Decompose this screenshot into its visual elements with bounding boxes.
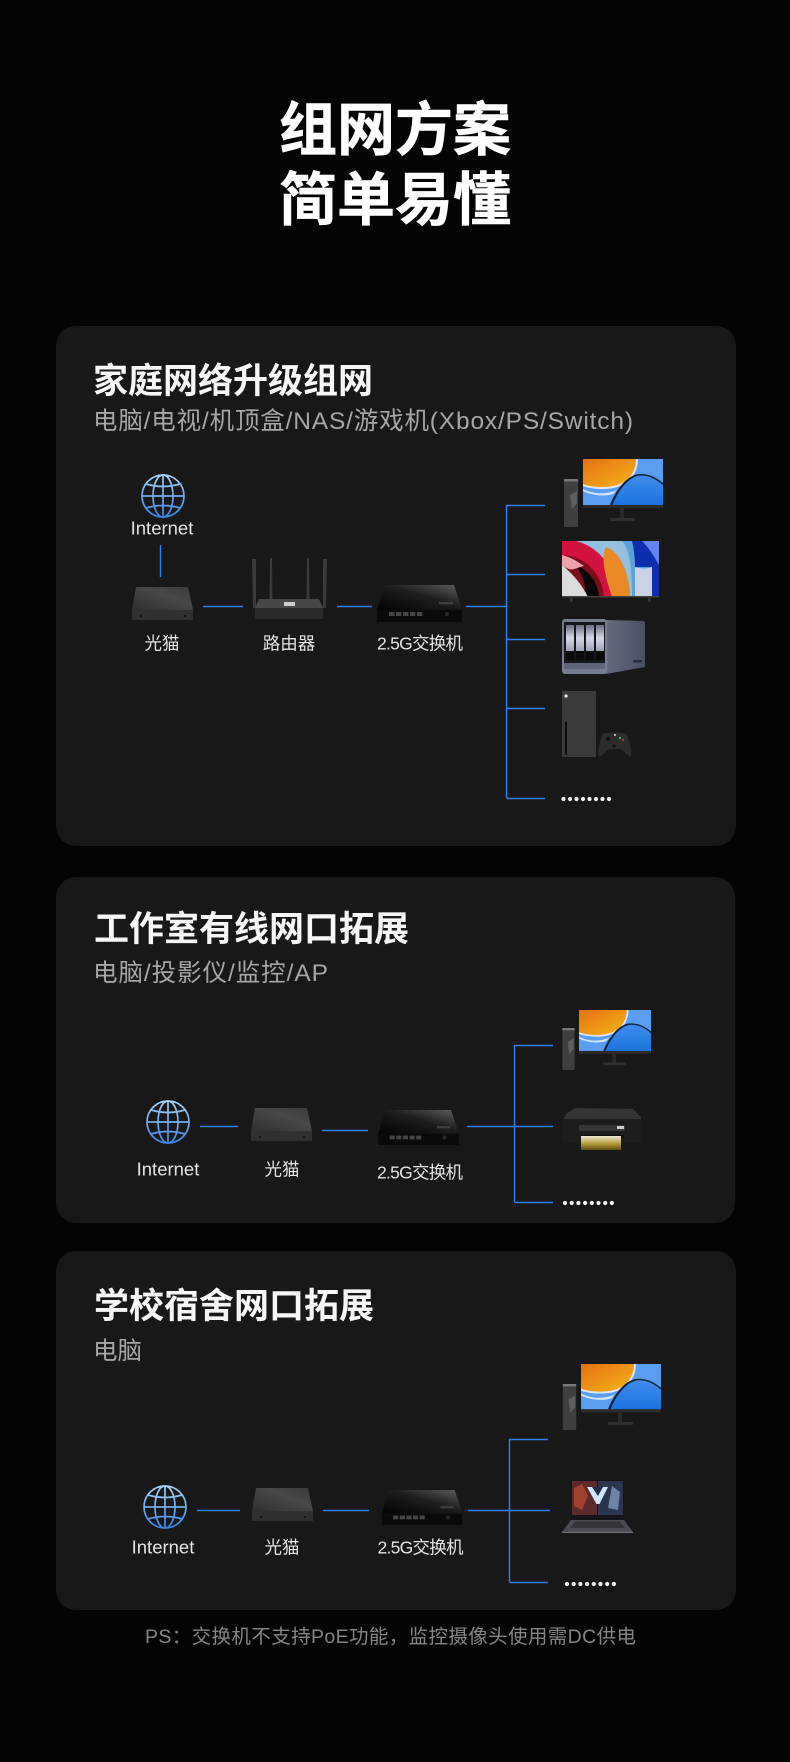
icon: 2.5G switch [377,585,462,622]
subtitle: dorm devices: 电脑 [93,1337,142,1365]
more devices dots [561,797,611,801]
icon: modem [252,1488,313,1521]
icon: desktop computer [562,1010,651,1070]
subtitle: studio devices: 电脑/投影仪/监控/AP [93,959,328,987]
label: modem: 光猫 [264,1160,300,1180]
connector tree: switch to devices [466,505,545,798]
panel: home network upgrade [56,326,736,846]
label: router: 路由器 [263,634,315,654]
icon: 2.5G switch [378,1110,459,1145]
label: switch: 2.5G交换机 [377,1162,464,1182]
title [279,98,511,233]
connector tree: switch to devices [467,1045,553,1202]
connector: internet to modem [200,1126,238,1128]
panel: school dorm expansion [56,1251,736,1610]
icon: printer [563,1108,641,1150]
connector: modem to router [203,606,243,608]
icon: NAS [562,619,645,674]
heading: home network: 家庭网络升级组网 [93,362,373,401]
label: switch: 2.5G交换机 [377,634,464,654]
icon: router [252,558,327,619]
label: Internet: Internet [131,518,193,538]
subtitle: home devices: 电脑/电视/机顶盒/NAS/游戏机(Xbox/PS/Switch) [93,407,633,435]
title: 组网方案 [279,98,511,163]
label: Internet: Internet [132,1536,194,1558]
label: modem: 光猫 [264,1538,300,1558]
label: Internet: Internet [137,1158,199,1180]
more devices dots [565,1582,616,1586]
icon: game console [562,691,631,757]
panel: studio wired expansion [56,877,735,1223]
connector: router to switch [337,606,372,608]
icon: internet globe [142,475,184,517]
connector tree: switch to devices [468,1439,550,1582]
icon: desktop computer [563,1364,661,1430]
label: modem: 光猫 [144,634,180,654]
more devices dots [563,1201,614,1205]
icon: desktop computer [564,459,663,527]
icon: television [562,541,659,602]
icon: modem [132,587,193,620]
connector: internet to modem [197,1510,240,1512]
footnote: PS：交换机不支持PoE功能，监控摄像头使用需DC供电 [145,1626,636,1648]
heading: studio: 工作室有线网口拓展 [94,910,409,949]
icon: modem [251,1108,312,1141]
icon: internet globe [144,1486,186,1528]
title: 简单易懂 [279,168,511,233]
icon: internet globe [147,1101,189,1143]
icon: laptop [562,1480,633,1533]
icon: 2.5G switch [382,1490,462,1525]
label: switch: 2.5G交换机 [378,1538,464,1558]
connector: internet to modem [160,545,162,577]
connector: modem to switch [323,1510,369,1512]
connector: modem to switch [322,1130,368,1132]
heading: dorm: 学校宿舍网口拓展 [94,1287,374,1326]
